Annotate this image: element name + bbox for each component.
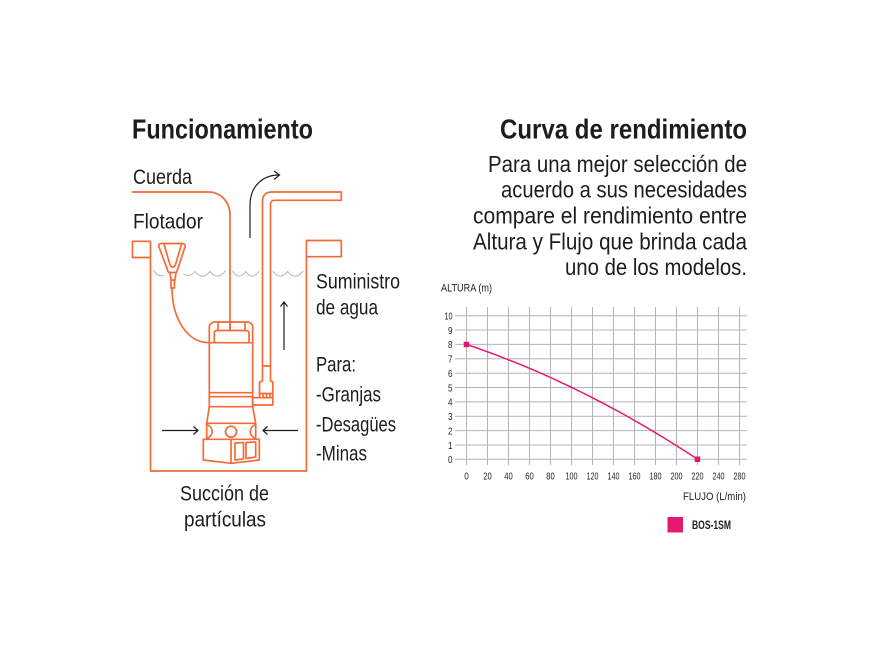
x axis labels: 20	[483, 470, 492, 482]
heading: Funcionamiento: Funcionamiento	[132, 114, 313, 144]
diagram: pipe connector	[253, 366, 273, 405]
label: Flotador: Flotador	[133, 209, 203, 233]
arrow: suction right	[263, 426, 298, 434]
diagram: rope	[132, 192, 230, 330]
x axis labels: 100	[566, 470, 578, 482]
label: Suministro de agua	[316, 270, 400, 320]
y axis labels: 7	[448, 354, 453, 366]
x axis labels: 240	[712, 470, 725, 482]
x axis labels: 80	[546, 470, 555, 482]
legend: BOS-1SM: BOS-1SM	[692, 520, 731, 532]
x axis labels: 220	[692, 470, 704, 482]
arrow: suction left	[162, 426, 198, 434]
x axis labels: 140	[608, 470, 620, 482]
y axis labels: 5	[448, 382, 453, 394]
paragraph: description: Para una mejor selección de	[488, 151, 747, 177]
label: Succión de partículas: partículas	[184, 508, 266, 532]
arrow: discharge flow	[250, 171, 280, 238]
y axis labels	[444, 310, 453, 466]
y axis labels: 10	[444, 310, 453, 322]
paragraph: description: uno de los modelos.	[565, 254, 747, 280]
x axis labels: 180	[650, 470, 662, 482]
label: Succión de partículas	[180, 482, 269, 532]
y axis labels: 6	[448, 368, 453, 380]
paragraph: description	[473, 151, 747, 280]
x axis labels	[464, 470, 746, 482]
x axis labels: 280	[734, 470, 746, 482]
diagram: tank walls	[132, 240, 341, 471]
x axis labels: 0	[464, 470, 469, 482]
y axis labels: 8	[448, 339, 453, 351]
label: Suministro de agua: Suministro	[316, 270, 400, 294]
label: Succión de partículas: Succión de	[180, 482, 269, 506]
icon: float	[159, 244, 209, 343]
label: uses list: -Minas	[316, 442, 367, 466]
data line	[466, 344, 698, 459]
y axis labels: 2	[448, 425, 453, 437]
paragraph: description: compare el rendimiento entre	[473, 202, 747, 228]
arrow: water supply up	[280, 302, 288, 350]
label: Cuerda: Cuerda	[133, 165, 192, 189]
x axis labels: 60	[525, 470, 534, 482]
axis title: ALTURA (m): ALTURA (m)	[441, 282, 492, 294]
x axis labels: 160	[628, 470, 641, 482]
y axis labels: 4	[448, 397, 453, 409]
diagram: water surface	[154, 270, 303, 276]
diagram: pump	[203, 322, 259, 463]
x axis labels: 120	[586, 470, 599, 482]
label: uses list: -Desagües	[316, 412, 396, 436]
x axis labels: 200	[670, 470, 683, 482]
label: Suministro de agua: de agua	[316, 296, 378, 320]
line chart: performance curve	[444, 307, 747, 482]
label: uses list: -Granjas	[316, 382, 381, 406]
paragraph: description: Altura y Flujo que brinda cada	[473, 228, 747, 254]
legend: BOS-1SM	[668, 517, 731, 532]
label: uses list: Para:	[316, 352, 356, 376]
x axis labels: 40	[504, 470, 513, 482]
diagram: discharge pipe	[262, 192, 341, 366]
data point: start	[464, 342, 469, 347]
data point: end	[695, 456, 700, 462]
y axis labels: 1	[448, 440, 453, 452]
label: uses list	[316, 352, 396, 466]
y axis labels: 3	[448, 411, 453, 423]
paragraph: description: acuerdo a sus necesidades	[501, 177, 747, 203]
heading: Curva de rendimiento: Curva de rendimiento	[500, 114, 747, 144]
y axis labels: 9	[448, 325, 453, 337]
chart grid	[455, 307, 747, 465]
axis title: FLUJO (L/min): FLUJO (L/min)	[683, 491, 746, 503]
y axis labels: 0	[448, 454, 453, 466]
